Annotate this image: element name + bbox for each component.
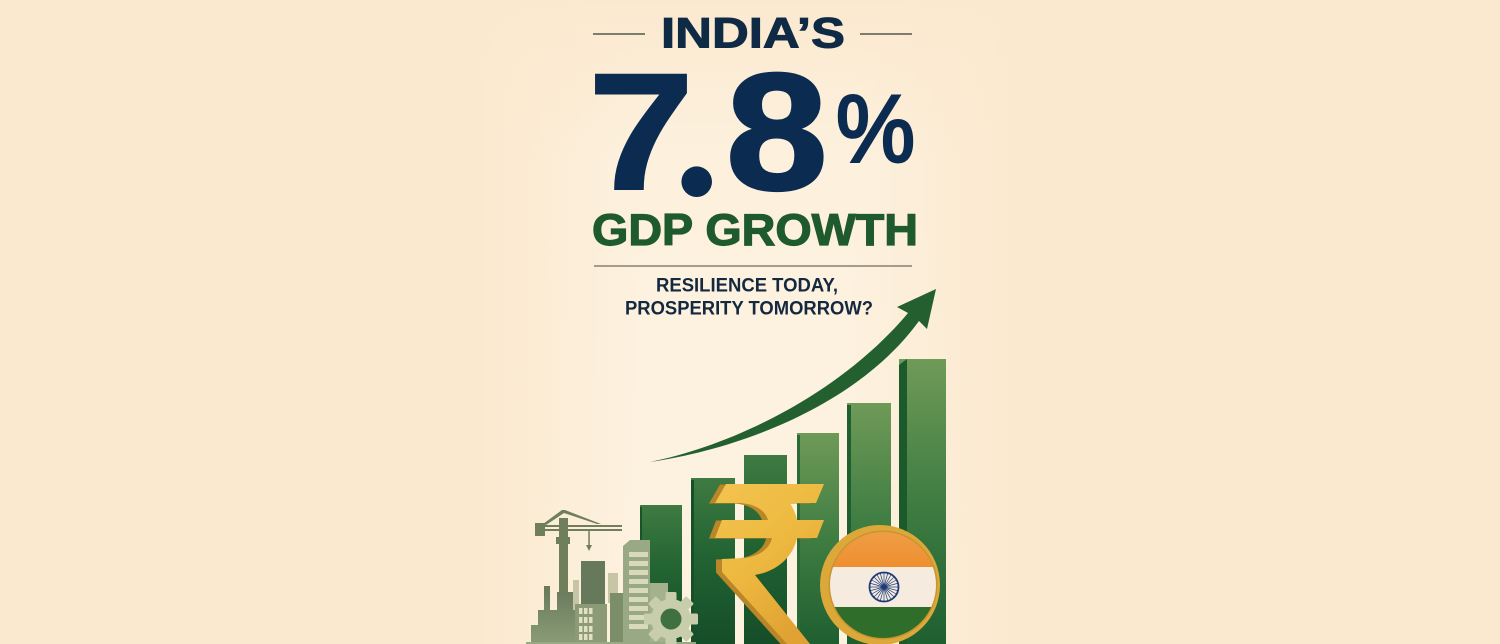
icon: rupee symbol	[709, 484, 824, 644]
headline figure: 7.8%: 8	[726, 39, 828, 224]
icon: gear	[644, 592, 698, 644]
bar chart	[640, 359, 946, 644]
city skyline	[526, 510, 698, 644]
headline figure: 7.8%	[588, 39, 915, 224]
bar 4	[797, 433, 839, 644]
windows	[579, 608, 592, 640]
dark tower	[581, 561, 605, 644]
growth arrow	[650, 289, 936, 462]
headline figure: 7.8%: 7	[588, 39, 694, 224]
flag stripes	[833, 532, 933, 567]
heading: GDP GROWTH: GDP GROWTH	[592, 206, 918, 255]
subtitle	[625, 276, 873, 320]
bar 5	[847, 403, 891, 644]
ground	[526, 642, 696, 644]
title: INDIA'S: INDIA’S	[661, 10, 845, 58]
icon: Ashoka chakra	[870, 572, 898, 602]
hazy spires	[573, 573, 618, 610]
factories	[531, 586, 576, 644]
icon: construction crane	[535, 510, 622, 622]
bar 2	[691, 478, 735, 644]
light tower	[623, 540, 668, 644]
bar 6	[899, 359, 946, 644]
headline figure: 7.8%: %	[836, 76, 915, 182]
bar 3	[744, 455, 787, 644]
subtitle: RESILIENCE TODAY,	[656, 276, 838, 296]
icon: India flag coin	[820, 525, 940, 644]
divider	[594, 265, 912, 267]
mid buildings	[575, 593, 625, 644]
bar 1	[640, 505, 682, 644]
subtitle: PROSPERITY TOMORROW?	[625, 298, 873, 320]
headline figure: 7.8%: .	[677, 65, 716, 222]
